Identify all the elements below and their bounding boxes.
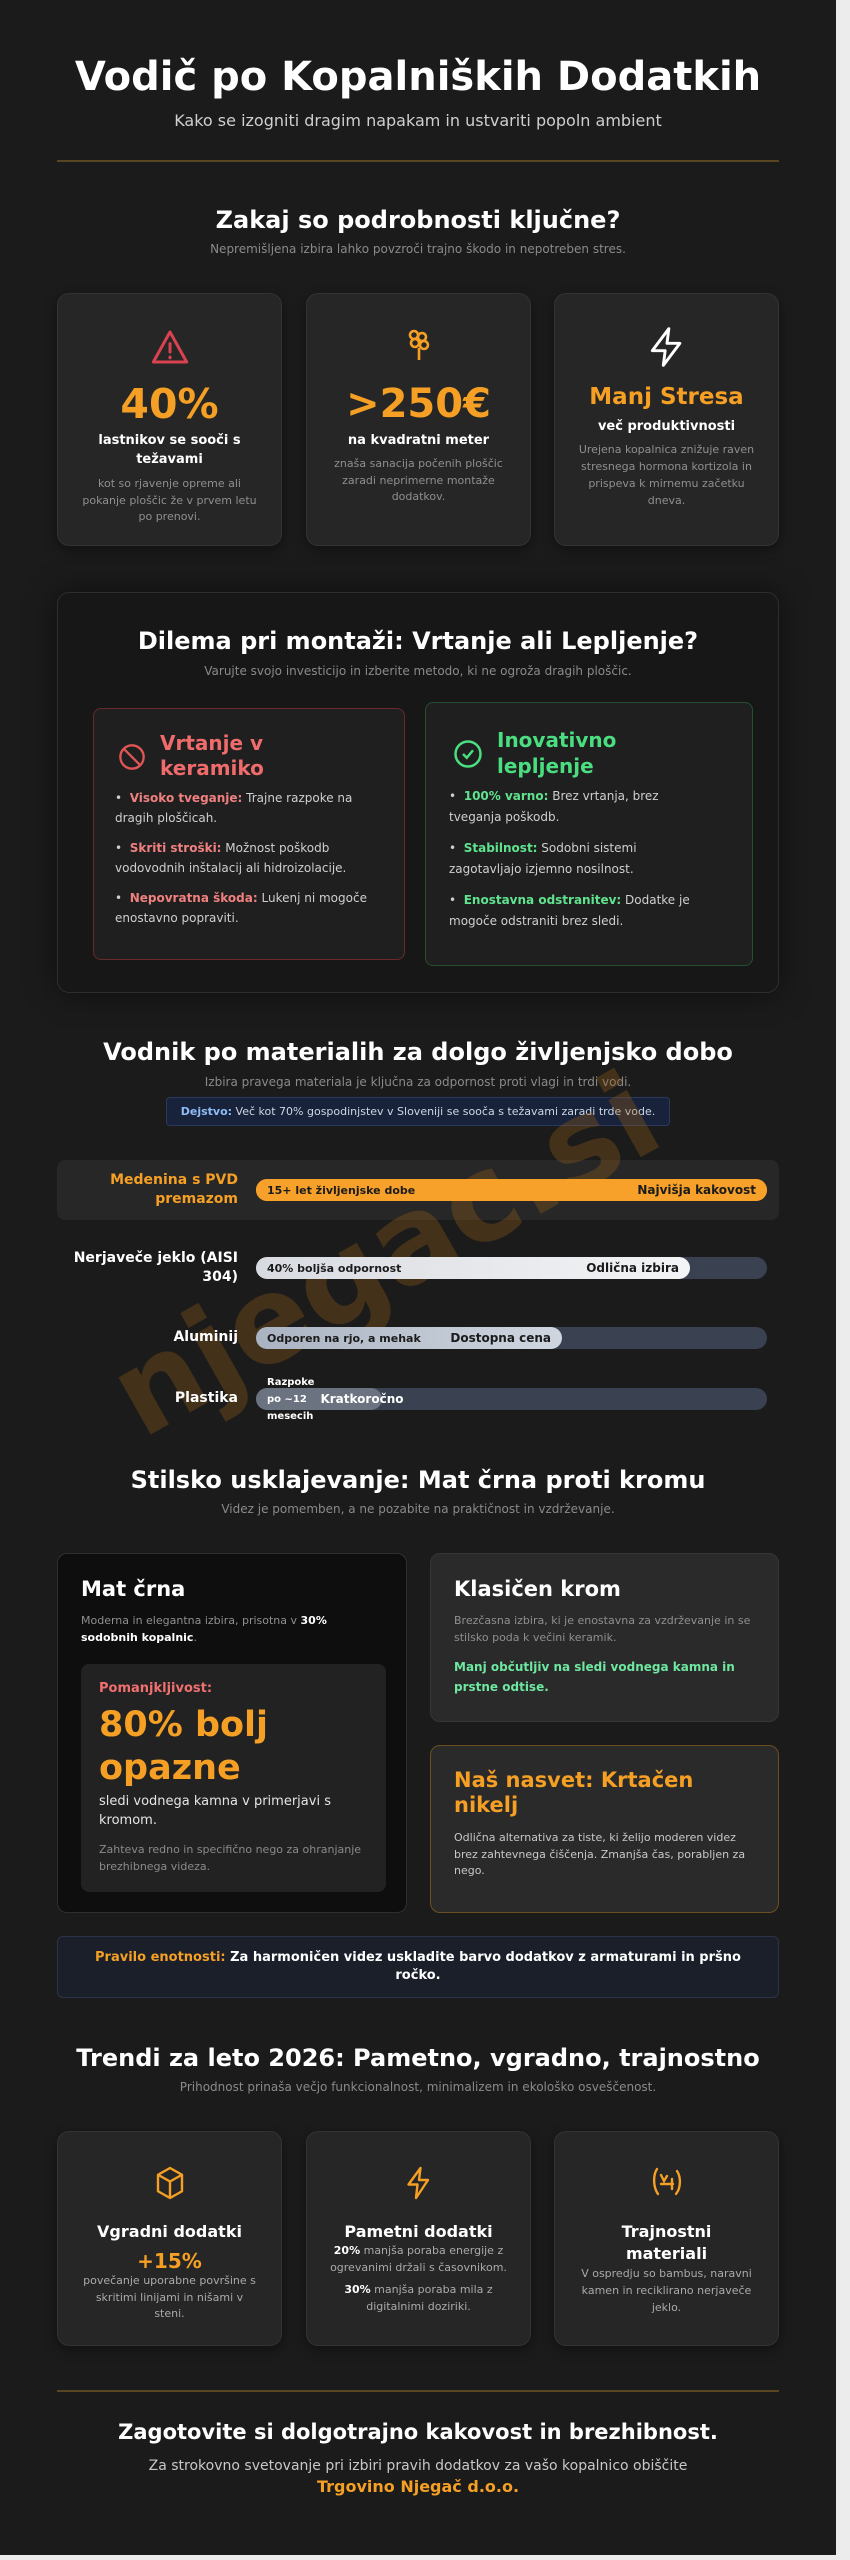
heading: dilema: Dilema pri montaži: Vrtanje ali Lepljenje?	[138, 627, 698, 655]
icon: cube	[156, 2166, 184, 2200]
row: medenina	[110, 1172, 767, 1207]
row: plastika: Plastika	[175, 1390, 238, 1406]
heading: trendi: Trendi za leto 2026: Pametno, vgradno, trajnostno	[76, 2044, 760, 2072]
subheading: Prihodnost prinaša večjo funkcionalnost, minimalizem in ekološko osveščenost.	[180, 2080, 656, 2094]
callout: pomanjkljivost: opazne	[99, 1748, 241, 1788]
row: aluminij	[173, 1327, 767, 1349]
row: jeklo	[74, 1250, 767, 1285]
desc: znaša sanacija počenih ploščic zaradi neprimerne montaže dodatkov.	[334, 457, 503, 503]
title: Trajnostni materiali	[622, 2222, 711, 2263]
desc: kot so rjavenje opreme ali pokanje ploščic že v prvem letu po prenovi.	[82, 477, 257, 523]
desc: Moderna in elegantna izbira, prisotna v 30% sodobnih kopalnic.	[81, 1614, 327, 1644]
desc: Urejena kopalnica znižuje raven stresnega hormona kortizola in prispeva k mirnemu začetku dneva.	[579, 443, 754, 507]
label: na kvadratni meter	[348, 433, 489, 448]
desc: Odlična alternativa za tiste, ki želijo moderen videz brez zahtevnega čiščenja. Zmanjša čas, porabljen za nego.	[454, 1831, 745, 1877]
title	[160, 731, 264, 780]
card: nasvet	[430, 1745, 779, 1913]
icon: lightning	[407, 2166, 430, 2200]
stat: Manj Stresa	[589, 384, 744, 410]
desc: Brezčasna izbira, ki je enostavna za vzdrževanje in se stilsko poda k večini keramik.	[454, 1614, 750, 1644]
watermark: njegac.si	[88, 1046, 682, 1465]
title: Vodič po Kopalniških Dodatkih	[75, 54, 761, 100]
callout: pravilo	[57, 1936, 779, 1998]
callout: dejstvo: Dejstvo: Več kot 70% gospodinjstev v Sloveniji se sooča s težavami zaradi trde vode.	[181, 1105, 655, 1118]
title: Vrtanje v	[160, 731, 263, 755]
card: krom	[430, 1553, 779, 1722]
row: jeklo: 40% boljša odpornost	[267, 1262, 401, 1274]
icon: eco	[652, 2168, 682, 2196]
title: lepljenje	[497, 754, 594, 778]
title: keramiko	[160, 756, 264, 780]
list: • Nepovratna škoda: Lukenj ni mogoče enostavno popraviti.	[115, 891, 367, 925]
footer heading: Zagotovite si dolgotrajno kakovost in brezhibnost.	[118, 2420, 718, 2444]
card: pametni: 30% manjša poraba mila z digitalnimi doziriki.	[344, 2283, 493, 2312]
row: plastika	[175, 1376, 767, 1422]
row: medenina: Medenina s PVD premazom	[110, 1172, 238, 1207]
desc: V ospredju so bambus, naravni kamen in reciklirano nerjaveče jeklo.	[581, 2267, 752, 2314]
row: aluminij: Aluminij	[173, 1329, 238, 1345]
row: medenina: 15+ let življenjske dobe	[267, 1184, 415, 1196]
row: jeklo: Odlična izbira	[586, 1261, 679, 1275]
list: mogoče odstraniti brez sledi.	[449, 914, 623, 928]
desc: povečanje uporabne površine s skritimi linijami in nišami v steni.	[83, 2274, 256, 2320]
card: 40%	[57, 293, 282, 546]
row: plastika: Razpoke po ~12 mesecih	[267, 1376, 314, 1422]
stat: 40%	[120, 380, 219, 428]
footer text: Za strokovno svetovanje pri izbiri pravih dodatkov za vašo kopalnico obiščite	[149, 2458, 687, 2474]
card: trajnostni	[554, 2131, 779, 2346]
stat: +15%	[137, 2249, 202, 2273]
callout: dejstvo	[166, 1097, 670, 1126]
row: aluminij: Odporen na rjo, a mehak	[267, 1332, 421, 1344]
icon: forbidden	[119, 744, 145, 770]
subheading: Varujte svojo investicijo in izberite metodo, ki ne ogroža dragih ploščic.	[204, 664, 632, 678]
row: plastika: Kratkoročno	[320, 1392, 403, 1406]
heading: materiali: Vodnik po materialih za dolgo življenjsko dobo	[103, 1038, 733, 1066]
icon: coins	[408, 330, 430, 360]
row: medenina: Najvišja kakovost	[637, 1183, 756, 1197]
list: • Stabilnost: Sodobni sistemi	[449, 841, 637, 855]
title: Naš nasvet: Krtačen nikelj	[454, 1768, 693, 1817]
card: stres	[554, 293, 779, 546]
heading: zakaj: Zakaj so podrobnosti ključne?	[216, 206, 620, 234]
subheading: Izbira pravega materiala je ključna za odpornost proti vlagi in trdi vodi.	[205, 1075, 631, 1089]
subheading: Videz je pomemben, a ne pozabite na praktičnost in vzdrževanje.	[221, 1502, 615, 1516]
icon: check	[454, 740, 482, 768]
desc: 20% manjša poraba energije z ogrevanimi držali s časovnikom.	[330, 2244, 507, 2274]
highlight: Manj občutljiv na sledi vodnega kamna in prstne odtise.	[454, 1660, 735, 1694]
list: • Visoko tveganje: Trajne razpoke na dragih ploščicah.	[115, 791, 352, 825]
title: Pametni dodatki	[344, 2222, 493, 2241]
callout: pomanjkljivost: Zahteva redno in specifično nego za ohranjanje brezhibnega videza.	[99, 1843, 361, 1873]
list: tveganja poškodb.	[449, 810, 559, 824]
list	[115, 791, 367, 925]
title: Klasičen krom	[454, 1577, 621, 1601]
stat: >250€	[346, 381, 491, 427]
title: Inovativno	[497, 728, 616, 752]
card: mat crna	[57, 1553, 407, 1913]
row: jeklo: Nerjaveče jeklo (AISI 304)	[74, 1250, 238, 1285]
card: 250	[306, 293, 531, 546]
footer text: Trgovino Njegač d.o.o.	[317, 2477, 519, 2496]
heading: stil: Stilsko usklajevanje: Mat črna proti kromu	[131, 1466, 705, 1494]
panel: dilema	[57, 592, 779, 993]
callout: pravilo: Pravilo enotnosti: Za harmoničen videz uskladite barvo dodatkov z armaturami in pršno ročko.	[95, 1950, 741, 1983]
callout: pomanjkljivost: Pomanjkljivost:	[99, 1681, 212, 1696]
icon: lightning	[650, 327, 682, 367]
card: vgradni	[57, 2131, 282, 2346]
list: • Enostavna odstranitev: Dodatke je	[449, 893, 690, 907]
callout: pomanjkljivost	[81, 1664, 386, 1892]
title: Vgradni dodatki	[97, 2222, 242, 2241]
subheading: zakaj: Nepremišljena izbira lahko povzroči trajno škodo in nepotreben stres.	[210, 242, 626, 256]
card: pametni	[306, 2131, 531, 2346]
row: aluminij: Dostopna cena	[450, 1331, 551, 1345]
label: več produktivnosti	[598, 419, 735, 434]
callout: pomanjkljivost: sledi vodnega kamna v primerjavi s kromom.	[99, 1794, 331, 1828]
label: lastnikov se sooči s težavami	[98, 433, 241, 467]
list	[449, 789, 690, 928]
card: lepljenje	[425, 702, 753, 966]
footer text	[149, 2458, 687, 2496]
list: • 100% varno: Brez vrtanja, brez	[449, 789, 659, 803]
card: vrtanje	[93, 708, 405, 960]
callout: pomanjkljivost: 80% bolj	[99, 1705, 268, 1745]
icon: warning	[152, 330, 188, 364]
list: • Skriti stroški: Možnost poškodb vodovodnih inštalacij ali hidroizolacije.	[115, 841, 346, 875]
subtitle: Kako se izogniti dragim napakam in ustvariti popoln ambient	[174, 111, 662, 130]
list: zagotavljajo izjemno nosilnost.	[449, 862, 634, 876]
title: Mat črna	[81, 1577, 185, 1601]
title	[497, 728, 616, 778]
